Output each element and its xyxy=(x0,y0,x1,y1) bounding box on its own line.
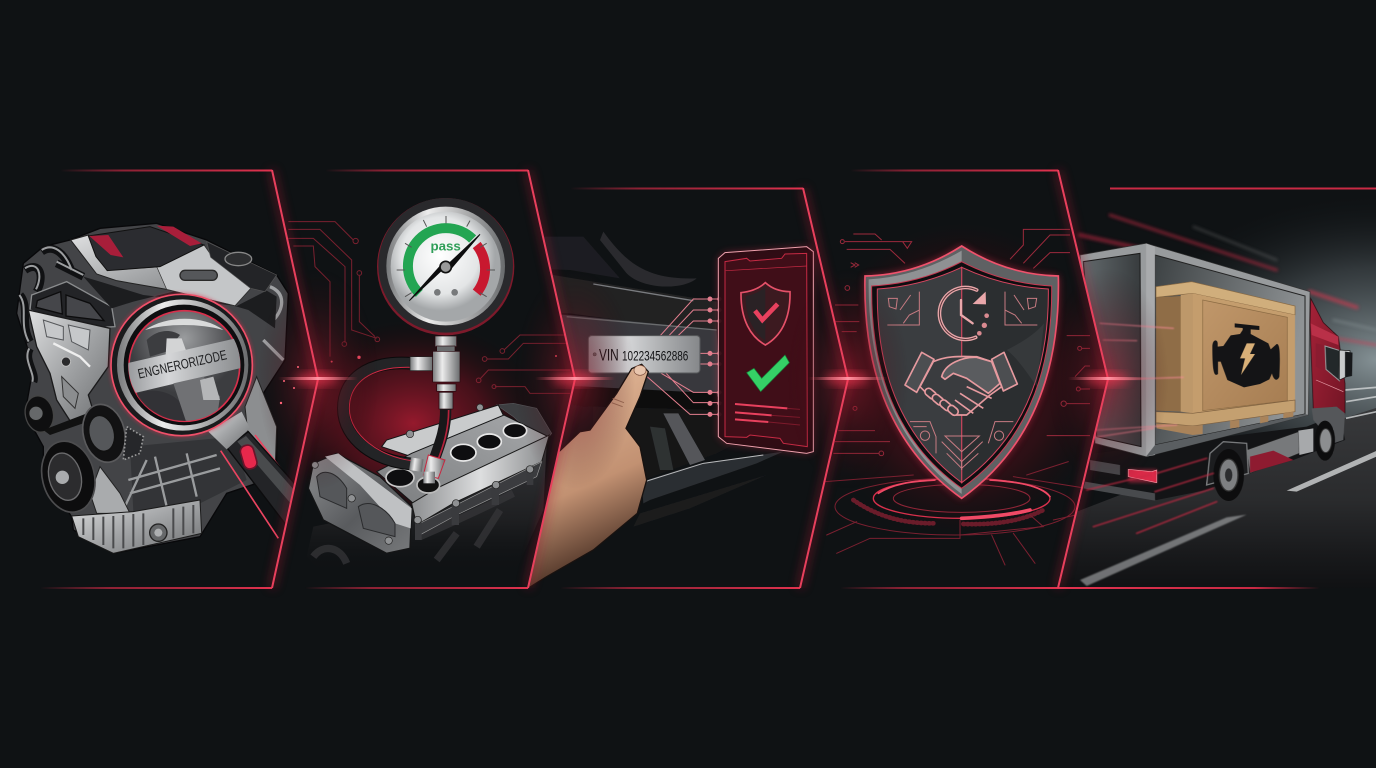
warranty illustration xyxy=(818,223,1105,565)
green check xyxy=(747,355,789,392)
chevron tip flares xyxy=(278,366,1148,404)
phone hologram xyxy=(718,247,813,453)
crate with engine icon xyxy=(1156,282,1295,435)
compression illustration xyxy=(280,198,570,577)
truck xyxy=(1080,243,1353,501)
tail light xyxy=(1128,469,1157,483)
VIN plate xyxy=(588,336,700,373)
engine icon xyxy=(1212,323,1280,387)
dashboard slats xyxy=(523,232,783,527)
hose xyxy=(343,363,449,467)
magnifier label: ENGNERORIZODE xyxy=(136,347,228,382)
pressure gauge xyxy=(377,198,514,335)
panel 3: VIN verification xyxy=(520,232,813,593)
shield with check xyxy=(741,283,790,345)
cargo box xyxy=(1080,243,1310,457)
gauge stem xyxy=(433,336,460,409)
panel 2: compression test xyxy=(280,198,570,577)
chevron frame lines xyxy=(40,170,1376,589)
panel 5: truck delivery xyxy=(1068,212,1376,586)
panel 4: warranty shield xyxy=(818,223,1105,565)
valve cover xyxy=(307,403,552,577)
chevron tip haze xyxy=(258,269,1168,489)
VIN illustration xyxy=(520,232,813,593)
shield xyxy=(865,246,1058,498)
pass label: pass xyxy=(430,239,461,254)
panel 1: engine inspection xyxy=(17,223,303,553)
red light trails xyxy=(1087,323,1217,533)
clock icon xyxy=(939,287,989,339)
circuit traces xyxy=(288,222,570,393)
speed streaks xyxy=(1080,215,1376,345)
hand xyxy=(520,364,648,593)
circuit traces xyxy=(833,229,1090,456)
handshake icon xyxy=(905,352,1017,417)
delivery illustration xyxy=(1068,212,1376,586)
shield ornaments xyxy=(887,292,1037,470)
VIN number: VIN 102234562886 xyxy=(599,345,688,364)
holographic platform xyxy=(825,462,1087,565)
engine illustration xyxy=(17,223,288,553)
magnifying glass xyxy=(109,292,303,538)
road xyxy=(1068,408,1376,560)
wheels xyxy=(1207,442,1248,485)
hologram connectors xyxy=(643,297,722,416)
chassis xyxy=(1134,423,1345,500)
cab xyxy=(1310,298,1345,440)
status lines xyxy=(735,404,800,425)
